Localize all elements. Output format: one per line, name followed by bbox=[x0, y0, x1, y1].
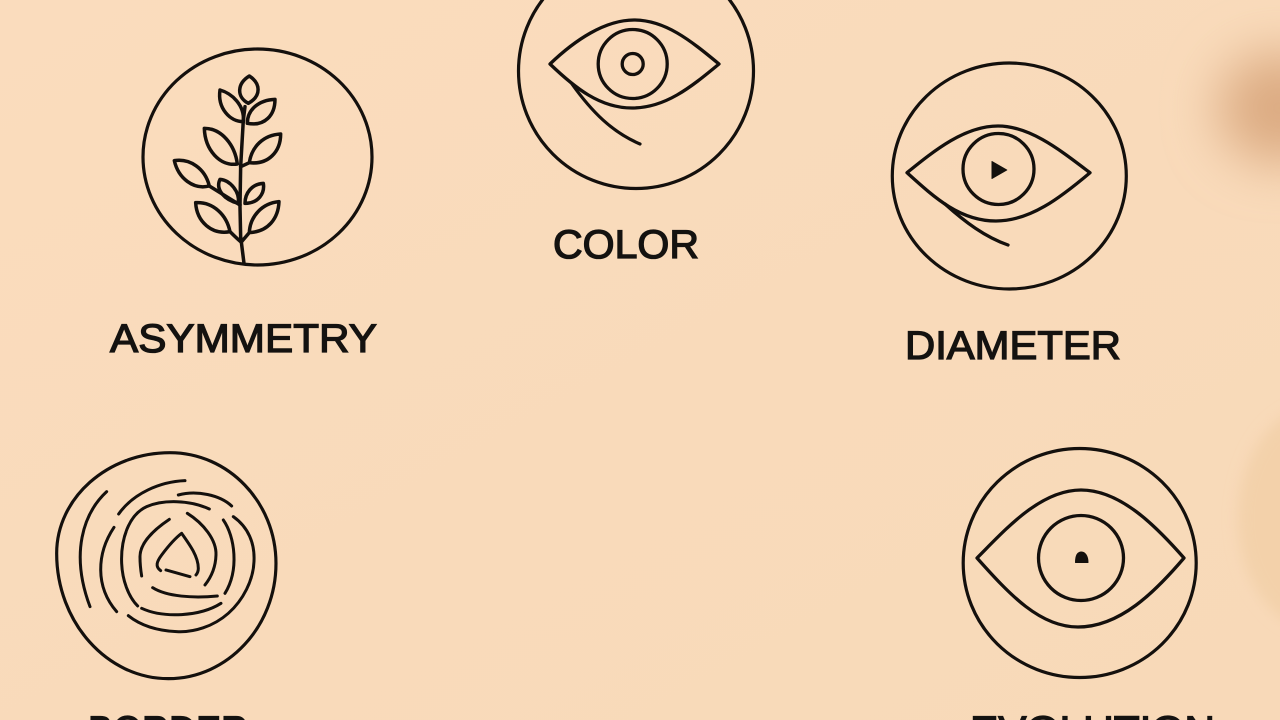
icon: border rings bbox=[57, 453, 276, 679]
heading: asymmetry: ASYMMETRY bbox=[110, 317, 377, 361]
skin shadow: lower right bbox=[1238, 406, 1280, 630]
icon: asymmetry plant bbox=[143, 49, 372, 265]
heading: color: COLOR bbox=[553, 223, 699, 267]
icon: evolution eye bbox=[963, 448, 1196, 678]
heading: diameter: DIAMETER bbox=[905, 324, 1121, 368]
icon: color eye bbox=[518, 0, 754, 188]
icon: diameter eye bbox=[892, 63, 1126, 289]
skin shadow: upper right bbox=[1218, 52, 1280, 164]
